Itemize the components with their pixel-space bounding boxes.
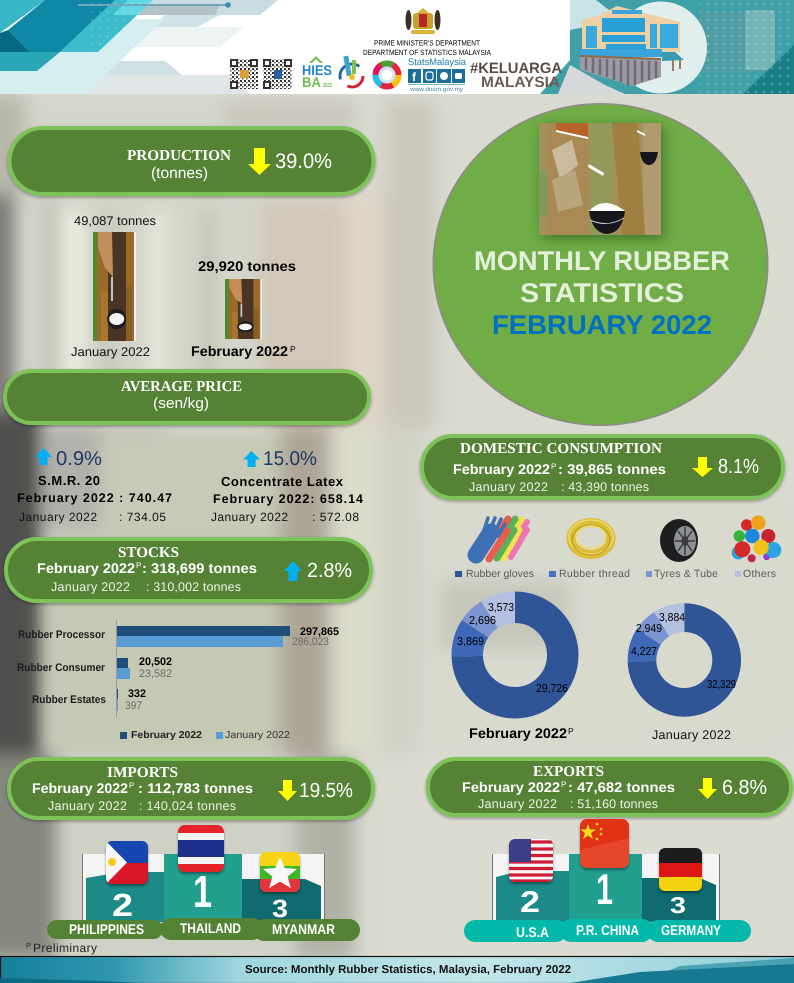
value labels: 397 bbox=[125, 700, 142, 712]
illustration: statistics department building bbox=[580, 2, 707, 94]
icon: down arrow bbox=[698, 778, 717, 799]
donut chart: February 2022: 29,726 bbox=[536, 683, 568, 695]
panel: stocks: February 2022 bbox=[37, 560, 135, 576]
donut chart: January 2022: 2,949 bbox=[636, 623, 662, 635]
value labels: 332 bbox=[128, 688, 146, 700]
bar chart: stocks by holder bbox=[17, 620, 339, 741]
panel: exports: : 51,160 tonnes bbox=[570, 797, 658, 811]
flag: China bbox=[580, 819, 629, 868]
icon: up arrow bbox=[243, 451, 260, 467]
price: S.M.R. 20: 0.9% bbox=[56, 448, 102, 470]
panel: production: 39.0% bbox=[275, 150, 332, 173]
logo: #KeluargaMalaysia: MALAYSIA bbox=[481, 74, 560, 91]
country labels: THAILAND bbox=[180, 920, 241, 936]
flag: Myanmar bbox=[260, 852, 300, 892]
panel: stocks: : 318,699 tonnes bbox=[142, 560, 257, 576]
price: S.M.R. 20: : 734.05 bbox=[119, 510, 166, 524]
panel: imports: January 2022 bbox=[48, 799, 127, 813]
bars bbox=[117, 626, 290, 711]
price: concentrate latex: Concentrate Latex bbox=[221, 474, 344, 489]
chart legend: February 2022 bbox=[131, 730, 202, 741]
production January 2022 bbox=[71, 214, 156, 359]
panel: imports bbox=[9, 759, 373, 818]
panel: production: (tonnes) bbox=[151, 165, 208, 182]
icon: tyre bbox=[660, 519, 698, 562]
flag: Germany bbox=[659, 848, 702, 891]
podium: imports ranking: 2 bbox=[112, 887, 133, 923]
price: concentrate latex: January 2022 bbox=[211, 510, 288, 524]
price: S.M.R. 20: February 2022 : 740.47 bbox=[17, 491, 172, 505]
country labels bbox=[464, 919, 751, 942]
panel: exports: February 2022 bbox=[462, 779, 560, 795]
panel: domestic consumption: : 39,865 tonnes bbox=[558, 461, 666, 477]
icon: balloons bbox=[732, 515, 781, 562]
panel: domestic consumption: DOMESTIC CONSUMPTION bbox=[460, 441, 662, 457]
country labels bbox=[47, 918, 360, 941]
icon: down arrow bbox=[692, 457, 713, 477]
legend: consumption categories: Rubber gloves bbox=[466, 568, 534, 580]
podium: exports ranking: 3 bbox=[670, 892, 686, 918]
donut chart: January 2022: 4,227 bbox=[631, 646, 657, 658]
panel: stocks: 2.8% bbox=[307, 559, 352, 582]
footer: source: Source: Monthly Rubber Statistics, Malaysia, February 2022 bbox=[245, 964, 571, 976]
production January 2022: January 2022 bbox=[71, 345, 150, 359]
chart legend: January 2022 bbox=[225, 730, 290, 741]
value labels: 297,865 bbox=[300, 626, 339, 638]
country labels: GERMANY bbox=[661, 922, 722, 938]
production February 2022: February 2022 bbox=[191, 343, 288, 359]
podium: imports ranking: 3 bbox=[272, 895, 288, 923]
title text: FEBRUARY 2022 bbox=[492, 310, 712, 340]
social links: StatsMalaysia: f bbox=[412, 70, 417, 84]
logo: HIES BA 2022: BA bbox=[302, 74, 321, 90]
panel: exports: 6.8% bbox=[722, 776, 767, 799]
podium: imports ranking bbox=[47, 825, 360, 941]
category labels: Rubber Consumer bbox=[17, 662, 106, 674]
value labels: 20,502 bbox=[139, 656, 172, 668]
panel: production: PRODUCTION bbox=[127, 148, 231, 164]
title text: STATISTICS bbox=[520, 278, 684, 308]
category labels: Rubber Processor bbox=[18, 629, 106, 641]
donut chart: February 2022 bbox=[457, 602, 574, 741]
legend: consumption categories: Others bbox=[743, 568, 776, 580]
title circle bbox=[432, 103, 768, 426]
podium: exports ranking: 1 bbox=[596, 866, 613, 914]
icon: QR codes bbox=[230, 59, 292, 89]
price: concentrate latex: : 572.08 bbox=[312, 510, 359, 524]
panel: imports: February 2022 bbox=[32, 780, 128, 796]
logo: HIES BA 2022: 2022 bbox=[323, 82, 332, 89]
podium: exports ranking: 2 bbox=[520, 886, 540, 919]
panel: exports: P bbox=[561, 780, 566, 789]
podium: exports ranking bbox=[464, 819, 751, 942]
panel: domestic consumption bbox=[422, 436, 783, 498]
production February 2022 bbox=[191, 258, 296, 359]
country labels: MYANMAR bbox=[272, 921, 335, 937]
price: S.M.R. 20: S.M.R. 20 bbox=[38, 473, 100, 488]
panel: imports: : 140,024 tonnes bbox=[139, 799, 236, 813]
value labels bbox=[125, 626, 339, 712]
header department text: PRIME MINISTER'S DEPARTMENT bbox=[374, 38, 480, 48]
production January 2022: 49,087 tonnes bbox=[74, 214, 156, 228]
podium: imports ranking: 1 bbox=[193, 866, 212, 917]
production February 2022: P bbox=[290, 344, 296, 354]
country labels: PHILIPPINES bbox=[69, 921, 144, 937]
legend: consumption categories: Tyres & Tube bbox=[654, 568, 718, 580]
icon: up arrow bbox=[284, 561, 302, 581]
icon: rubber thread bbox=[569, 520, 613, 555]
header right: photo background bbox=[540, 0, 794, 94]
icon: down arrow bbox=[278, 780, 297, 801]
footnote: preliminary: P bbox=[26, 941, 31, 950]
header banner bbox=[0, 0, 794, 94]
title text bbox=[474, 246, 730, 340]
panel: average price bbox=[5, 371, 369, 423]
panel: domestic consumption: 8.1% bbox=[718, 455, 759, 478]
photo: tapped rubber trees bbox=[539, 123, 661, 235]
value labels: 286,023 bbox=[292, 636, 329, 648]
price: S.M.R. 20 bbox=[17, 448, 172, 524]
donut chart: January 2022: 32,329 bbox=[707, 679, 736, 691]
panel: domestic consumption: : 43,390 tonnes bbox=[561, 480, 649, 494]
chart legend bbox=[120, 730, 290, 741]
panel: imports: : 112,783 tonnes bbox=[138, 780, 253, 796]
logo: census swirl bbox=[340, 56, 364, 88]
panel: stocks: P bbox=[136, 561, 141, 570]
panel: imports: P bbox=[129, 781, 134, 790]
donut chart: January 2022 bbox=[631, 612, 736, 742]
donut chart: February 2022: February 2022 bbox=[469, 725, 567, 741]
flag: Thailand bbox=[178, 825, 224, 872]
panel: exports bbox=[428, 759, 791, 815]
panel: exports: EXPORTS bbox=[533, 764, 604, 780]
logo: HIES BA 2022 bbox=[302, 56, 332, 90]
panel: stocks: STOCKS bbox=[118, 545, 179, 561]
social links: StatsMalaysia bbox=[408, 57, 467, 93]
panel: domestic consumption: January 2022 bbox=[469, 480, 548, 494]
donut chart: February 2022: 3,869 bbox=[457, 636, 484, 648]
logo: #KeluargaMalaysia: #KELUARGA bbox=[470, 60, 562, 77]
flag: Philippines bbox=[106, 841, 148, 884]
header department text bbox=[363, 38, 492, 57]
country labels: P.R. CHINA bbox=[576, 922, 639, 938]
icon: national crest bbox=[406, 8, 440, 34]
panel: imports: 19.5% bbox=[299, 779, 353, 802]
icon: rubber gloves bbox=[476, 518, 527, 559]
social links: StatsMalaysia: StatsMalaysia bbox=[408, 57, 467, 68]
logo: HIES BA 2022: HIES bbox=[302, 62, 332, 78]
panel: average price: AVERAGE PRICE bbox=[121, 379, 242, 395]
legend: consumption categories: Rubber thread bbox=[559, 568, 630, 580]
price: concentrate latex bbox=[211, 448, 363, 524]
social links: StatsMalaysia: www.dosm.gov.my bbox=[409, 86, 463, 93]
panel: stocks: : 310,002 tonnes bbox=[146, 580, 241, 594]
panel: production bbox=[10, 128, 374, 194]
footer: source bbox=[0, 956, 794, 983]
donut chart: February 2022: P bbox=[568, 726, 574, 736]
donut chart: January 2022: 3,884 bbox=[659, 612, 686, 624]
production February 2022: 29,920 tonnes bbox=[198, 258, 296, 274]
panel: domestic consumption: P bbox=[551, 462, 556, 471]
category labels: Rubber Estates bbox=[32, 694, 106, 706]
header department text: DEPARTMENT OF STATISTICS MALAYSIA bbox=[363, 48, 492, 57]
donut chart: January 2022: January 2022 bbox=[652, 728, 731, 742]
legend: consumption categories bbox=[455, 568, 776, 580]
country labels: U.S.A bbox=[516, 924, 549, 940]
logo: SDG wheel bbox=[376, 64, 398, 86]
panel: exports: : 47,682 tonnes bbox=[568, 779, 675, 795]
price: concentrate latex: February 2022: 658.14 bbox=[213, 492, 363, 506]
flag: USA bbox=[509, 839, 553, 882]
title text: MONTHLY RUBBER bbox=[474, 246, 730, 276]
panel: average price: (sen/kg) bbox=[153, 395, 209, 412]
icon: down arrow bbox=[248, 148, 271, 175]
category labels bbox=[17, 629, 106, 706]
panel: imports: IMPORTS bbox=[107, 765, 178, 781]
icon: up arrow bbox=[35, 448, 52, 465]
panel: exports: January 2022 bbox=[478, 797, 557, 811]
panel: stocks: January 2022 bbox=[51, 580, 130, 594]
donut chart: February 2022: 3,573 bbox=[488, 602, 514, 614]
panel: stocks bbox=[6, 539, 371, 601]
logo: #KeluargaMalaysia bbox=[470, 60, 562, 91]
price: concentrate latex: 15.0% bbox=[263, 448, 317, 470]
value labels: 23,582 bbox=[139, 668, 172, 680]
donut chart: February 2022: 2,696 bbox=[469, 615, 496, 627]
price: S.M.R. 20: January 2022 bbox=[19, 510, 97, 524]
panel: domestic consumption: February 2022 bbox=[453, 461, 550, 477]
footnote: preliminary: Preliminary bbox=[33, 941, 97, 955]
